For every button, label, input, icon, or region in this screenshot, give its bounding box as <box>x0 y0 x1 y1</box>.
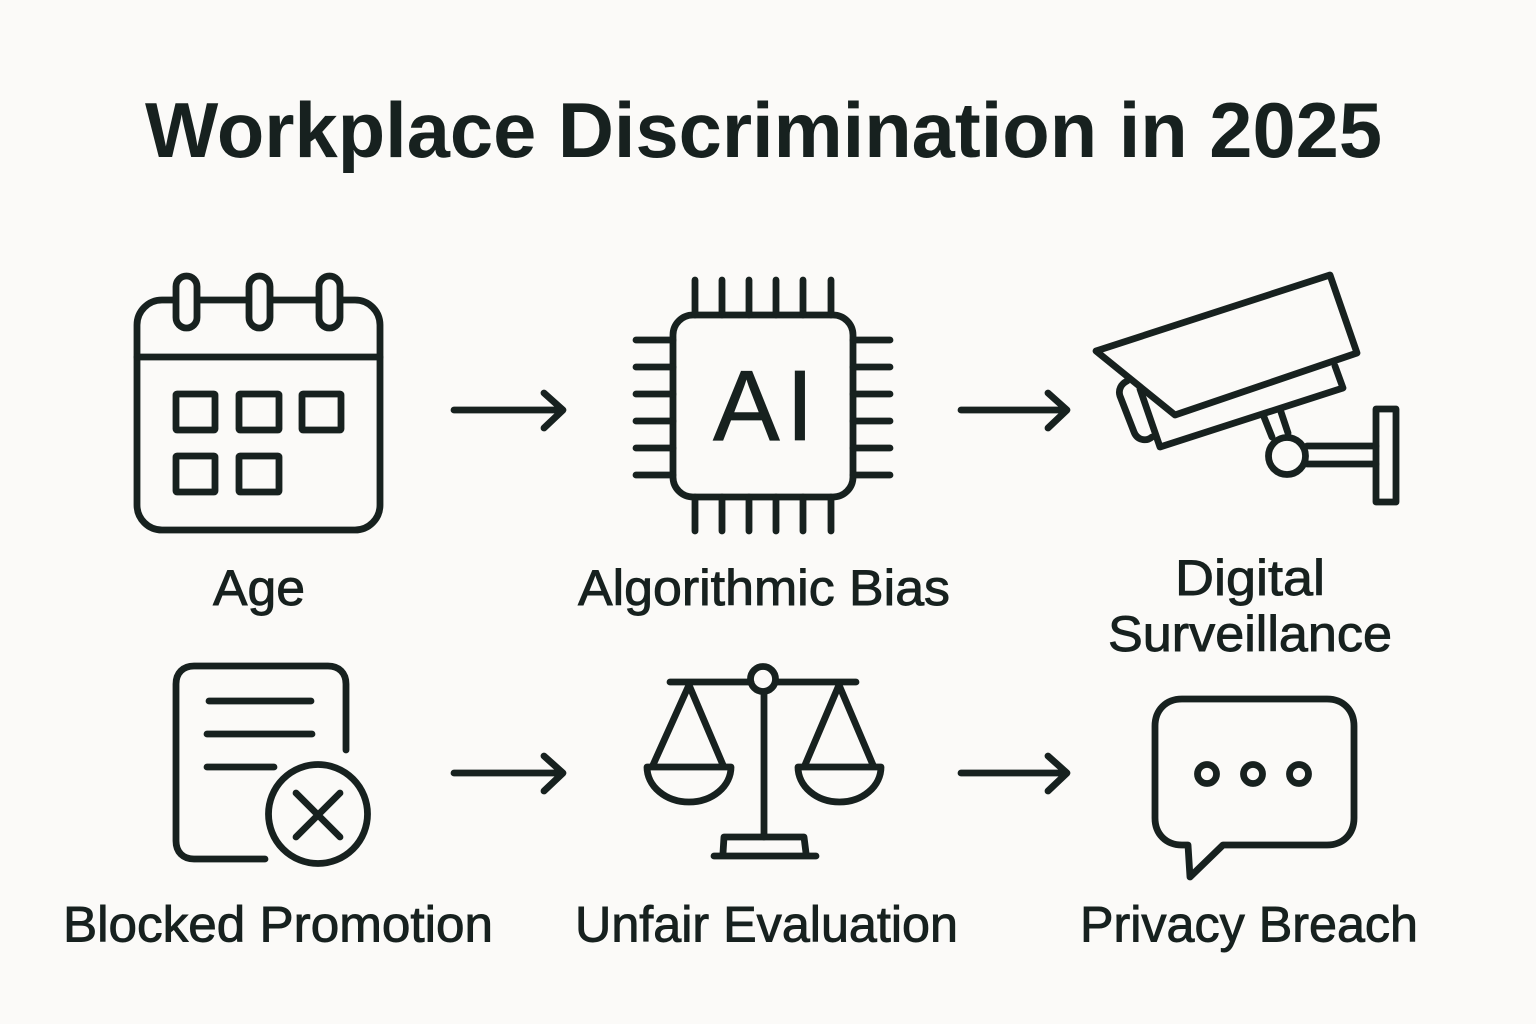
label: age: Age <box>213 560 305 616</box>
icon: AI chip: AI <box>713 350 814 462</box>
arrow: blocked promotion to unfair evaluation <box>454 756 563 791</box>
label: digital surveillance <box>1108 550 1392 662</box>
icon: speech bubble <box>1155 699 1354 877</box>
label: digital surveillance: Digital <box>1175 550 1325 606</box>
label: algorithmic bias: Algorithmic Bias <box>578 560 950 616</box>
icon: surveillance camera <box>1096 275 1396 502</box>
label: unfair evaluation: Unfair Evaluation <box>575 896 958 952</box>
icon: blocked document <box>176 666 368 864</box>
arrow: age to algorithmic bias <box>454 393 563 428</box>
label: privacy breach: Privacy Breach <box>1080 896 1418 952</box>
icon: calendar <box>137 276 380 530</box>
arrow: algorithmic bias to digital surveillance <box>961 393 1067 428</box>
label: digital surveillance: Surveillance <box>1108 606 1392 662</box>
icon: AI chip <box>636 280 890 531</box>
title: Workplace Discrimination in 2025 <box>145 86 1382 174</box>
icon: balance scale <box>647 666 881 856</box>
label: blocked promotion: Blocked Promotion <box>63 896 493 952</box>
arrow: unfair evaluation to privacy breach <box>961 756 1067 791</box>
